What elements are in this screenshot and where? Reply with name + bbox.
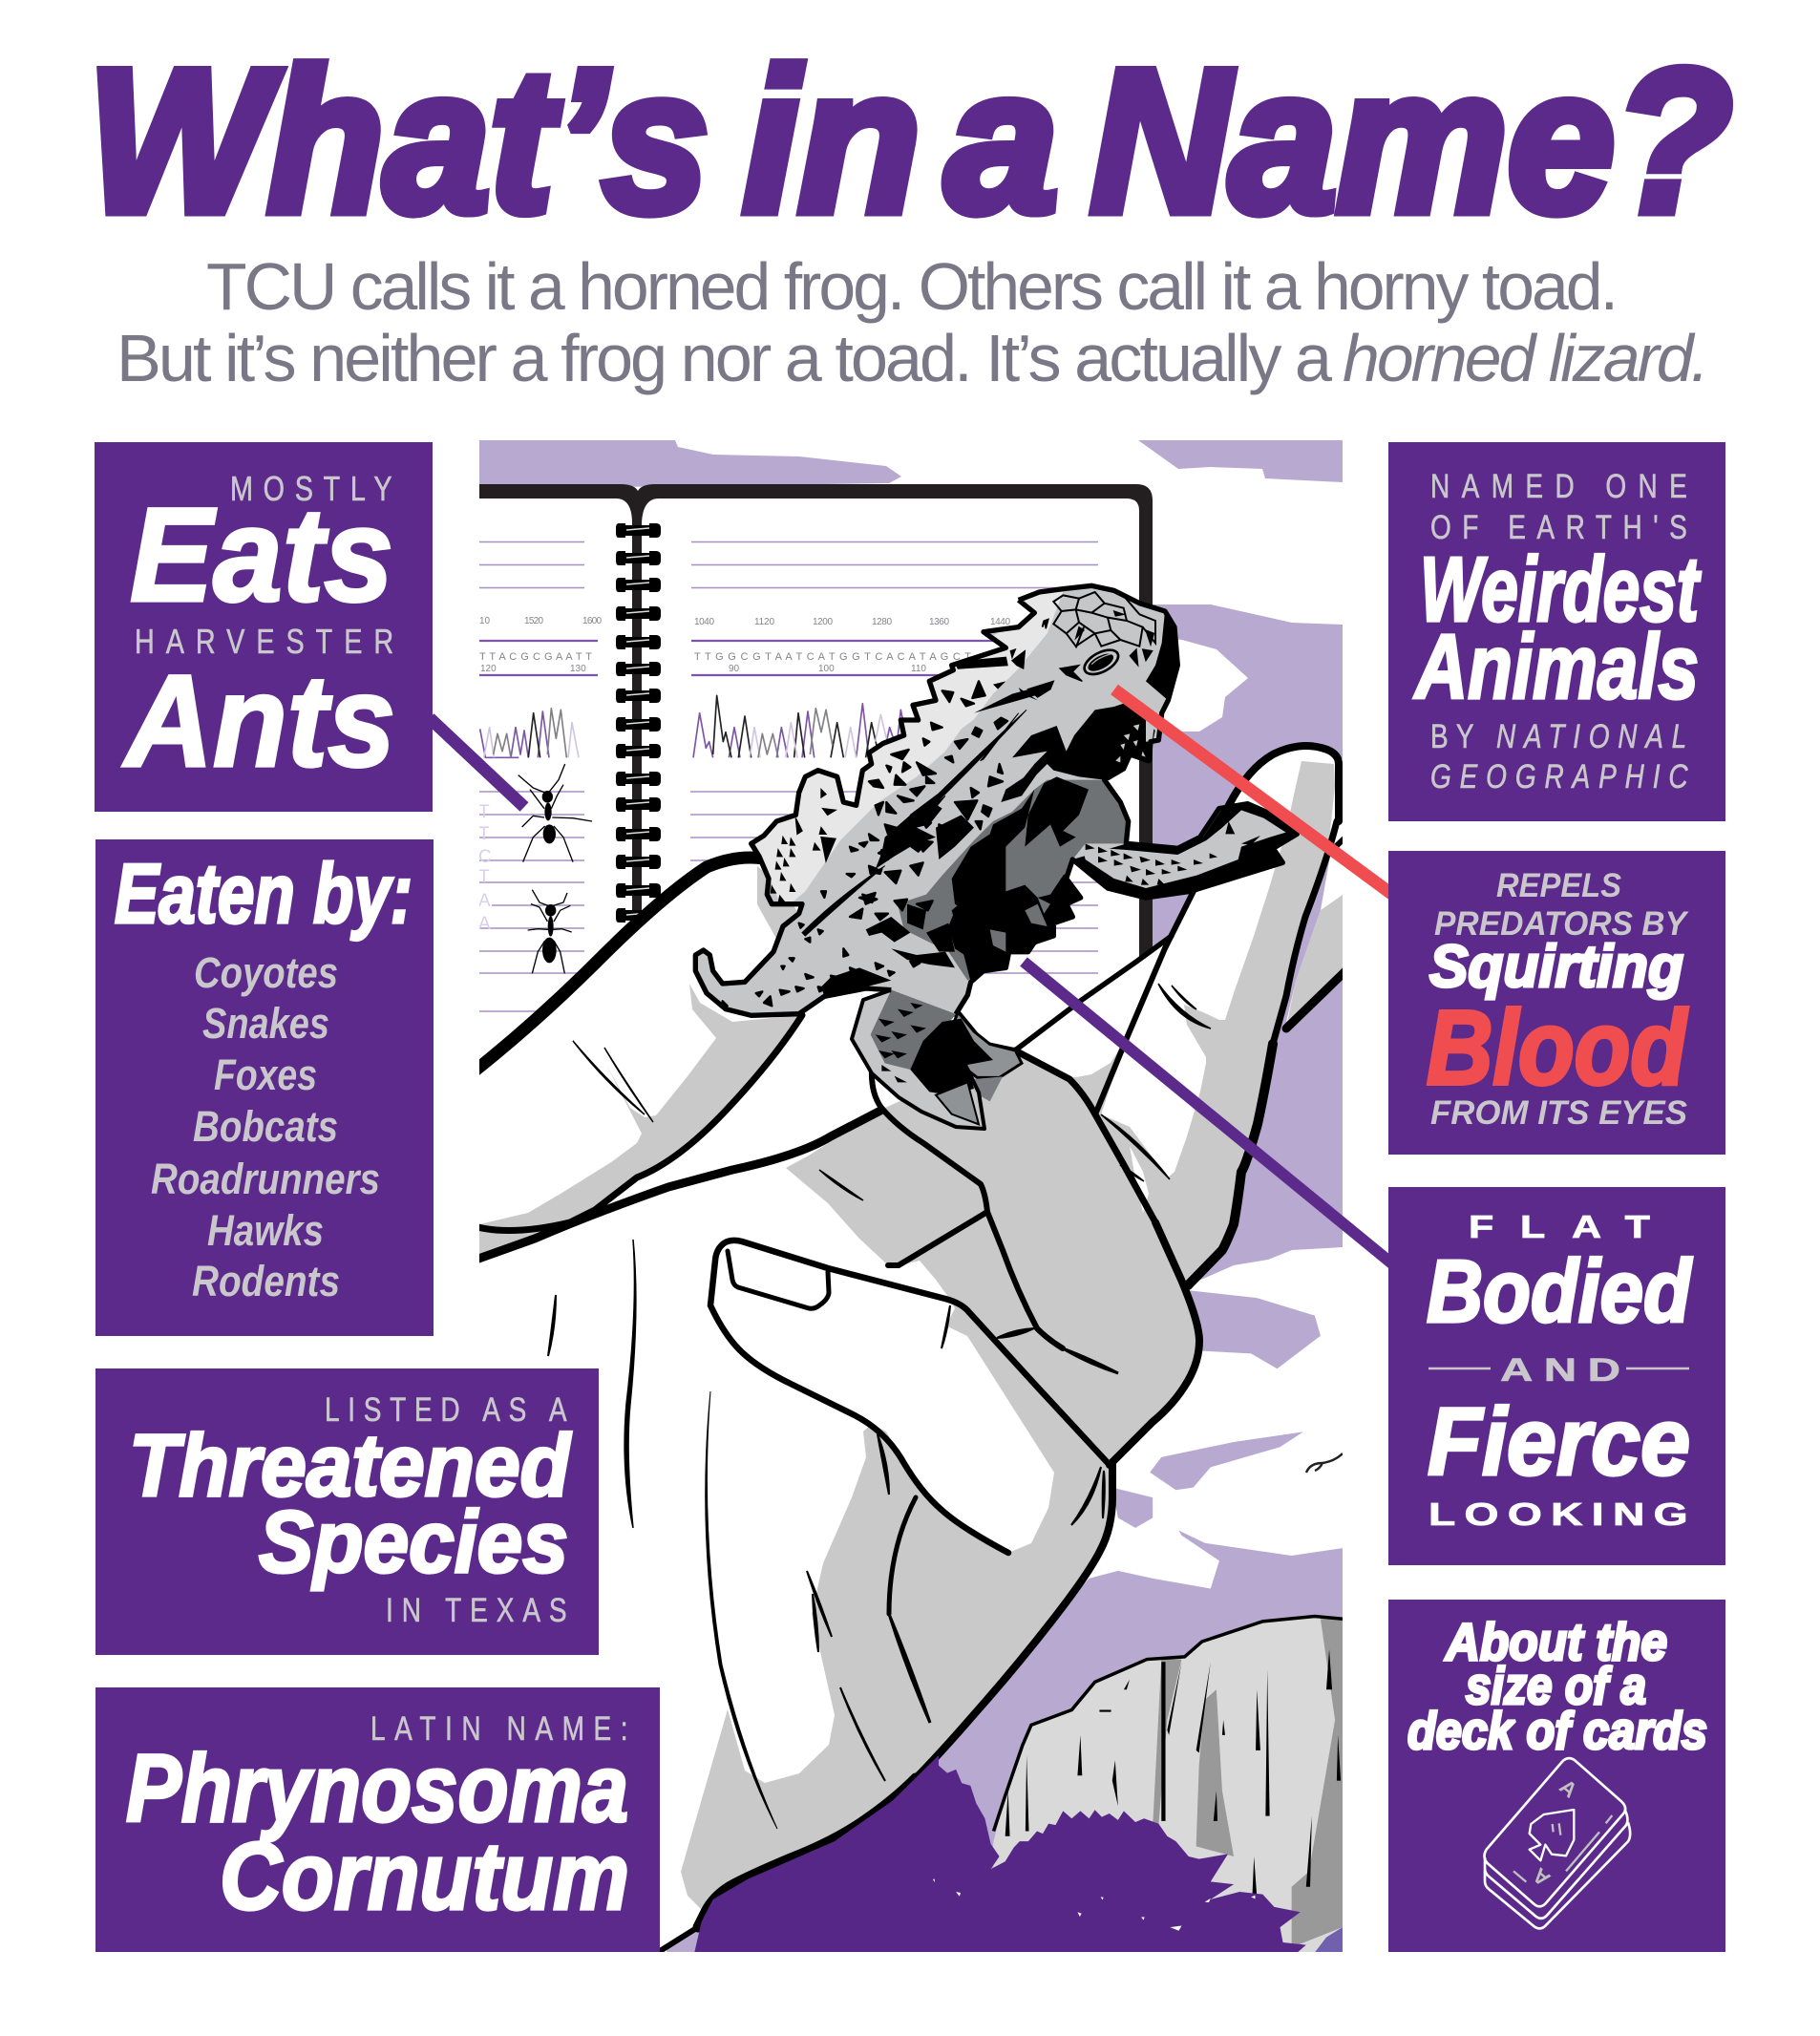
panel: squirting blood: REPELS [1496, 867, 1621, 904]
sequencing labels: 1040 [694, 617, 714, 627]
cliff [991, 1617, 1343, 1953]
predator list: Snakes [202, 999, 329, 1048]
sequencing labels: 130 [570, 664, 586, 674]
panel: weirdest animals: Weirdest [1420, 539, 1702, 641]
panel: weirdest animals [1388, 442, 1725, 821]
sequencing labels: 110 [911, 664, 926, 674]
panel: squirting blood: FROM ITS EYES [1430, 1094, 1687, 1132]
notebook ruled lines [479, 542, 1098, 1011]
title: a [945, 28, 1058, 255]
divider: and: AND [1500, 1352, 1620, 1388]
sequencing labels: 90 [729, 664, 740, 674]
panel: threatened species [95, 1368, 599, 1655]
chromatogram left [480, 709, 579, 757]
sequencing labels: 1200 [813, 617, 833, 627]
panel: weirdest animals: Animals [1413, 616, 1699, 718]
panel: eaten by predators: Eaten by: [115, 846, 413, 941]
panel: flat bodied and fierce looking: Bodied [1427, 1241, 1693, 1341]
sequencing labels: 1440 [990, 617, 1010, 627]
title: in [743, 28, 921, 255]
panel: eaten by predators [95, 839, 434, 1336]
panel: flat bodied and fierce looking: FLAT [1469, 1210, 1650, 1245]
icon: playing cards: A [1555, 1774, 1582, 1802]
panel: flat bodied and fierce looking [1388, 1187, 1725, 1565]
lizard forearm scales [771, 790, 836, 901]
hand: grey shading [479, 761, 1335, 1910]
callout line: blood from eye [1114, 689, 1394, 896]
lizard back and flank scales [711, 681, 1007, 1007]
central illustration [468, 440, 1348, 1958]
lizard head scale net [1043, 592, 1155, 647]
faded base letters: C [478, 847, 492, 867]
blood word: Blood [1427, 989, 1688, 1107]
callout line: flat body [1024, 962, 1394, 1265]
panel: weirdest animals: BY [1430, 717, 1474, 755]
subtitle: TCU calls it a horned frog. Others call it a horny toad. [206, 249, 1616, 324]
sequencing labels: 1360 [929, 617, 949, 627]
chromatogram right [693, 695, 904, 757]
notebook [478, 484, 1153, 1065]
callout line: ants [430, 718, 524, 807]
panel: deck of cards: deck of cards [1407, 1701, 1707, 1760]
panel: squirting blood: Squirting [1429, 934, 1683, 1000]
panel: latin name: Cornutum [220, 1823, 629, 1930]
panel: mostly eats harvester ants: HARVESTER [135, 622, 393, 661]
hand: black outlines [468, 746, 1348, 1958]
panel: latin name: LATIN NAME: [370, 1709, 628, 1748]
white cloud beside head [1163, 640, 1248, 732]
lizard body [698, 588, 1293, 1014]
predator list [151, 948, 380, 1305]
panel: weirdest animals: GEOGRAPHIC [1430, 757, 1689, 795]
predator list: Roadrunners [151, 1155, 380, 1203]
panel: mostly eats harvester ants [95, 442, 433, 812]
hand: white base [632, 750, 1343, 1943]
spiral rings and spine [616, 501, 661, 941]
panel: deck of cards [1388, 1600, 1725, 1952]
predator list: Rodents [192, 1257, 340, 1305]
panel: squirting blood: PREDATORS BY [1434, 905, 1689, 943]
hand: white highlights [873, 761, 1302, 1552]
lizard dorsal ridge [802, 710, 1026, 936]
lizard eye [1083, 648, 1119, 676]
panel: latin name [95, 1687, 660, 1952]
predator list: Bobcats [193, 1102, 338, 1151]
notebook cover [478, 484, 1153, 958]
panel: mostly eats harvester ants: MOSTLY [230, 469, 392, 508]
icon: bird [1306, 1453, 1343, 1473]
panel: flat bodied and fierce looking: LOOKING [1428, 1496, 1688, 1532]
faded base letters [479, 804, 491, 928]
sky: lavender shapes and clouds [478, 440, 1343, 1953]
title [88, 28, 1732, 255]
sequencing labels: 1600 [582, 616, 602, 626]
panel: mostly eats harvester ants: Eats [130, 479, 393, 629]
lizard flank black blotches [821, 764, 1044, 996]
lizard rear leg and foot [852, 990, 1022, 1129]
sequencing labels: 100 [818, 664, 835, 674]
hand: taper creases [548, 984, 1211, 1829]
cliff and bush [694, 1617, 1343, 1953]
panel: deck of cards: size of a [1466, 1656, 1646, 1715]
panel: squirting blood [1388, 851, 1725, 1155]
sequencing labels: 10 [479, 616, 491, 626]
panel: mostly eats harvester ants: Ants [122, 648, 395, 795]
panel: threatened species: Species [259, 1494, 568, 1591]
faded base letters: A [478, 891, 491, 911]
subtitle: But it’s neither a frog nor a toad. It’s actually a [116, 321, 1332, 395]
horned lizard [688, 573, 1324, 1129]
panel: threatened species: LISTED AS A [325, 1390, 567, 1429]
sequencing labels [479, 616, 1010, 674]
bush [694, 1755, 1306, 1953]
title: What’s [88, 28, 709, 255]
panel: weirdest animals: NAMED ONE [1430, 467, 1687, 505]
panel: weirdest animals: OF EARTH'S [1430, 508, 1687, 546]
predator list: Hawks [207, 1206, 324, 1255]
faded base letters: T [478, 802, 490, 822]
faded base letters: A [478, 914, 491, 934]
panel: deck of cards: About the [1444, 1612, 1667, 1671]
icon: playing cards: A [1528, 1863, 1555, 1891]
faded base letters: T [478, 867, 490, 887]
panel: flat bodied and fierce looking: Fierce [1428, 1389, 1690, 1495]
lizard teeth [1115, 707, 1160, 762]
sequencing labels: 1280 [872, 617, 892, 627]
title: Name? [1090, 28, 1732, 255]
sequencing labels: T T A C G C G A A T T [479, 651, 592, 663]
predator list: Coyotes [194, 948, 338, 997]
icon: ants [518, 764, 592, 973]
hand: back finger behind [1286, 821, 1343, 1022]
panel: weirdest animals: NATIONAL [1496, 717, 1686, 755]
sequencing labels: 120 [480, 664, 497, 674]
subtitle: horned lizard. [1343, 321, 1706, 395]
subtitle [116, 249, 1706, 395]
sequencing labels: T T G G C G T A A T C A T G G T C A C A T A G C T [694, 651, 971, 663]
panel: threatened species: IN TEXAS [386, 1591, 567, 1629]
panel: latin name: Phrynosoma [126, 1735, 628, 1842]
sequencing labels: 1120 [754, 617, 774, 627]
panel: threatened species: Threatened [129, 1417, 572, 1515]
faded base letters: T [478, 824, 490, 844]
sequencing labels: 1520 [524, 616, 543, 626]
icon: playing cards [1485, 1758, 1630, 1928]
predator list: Foxes [214, 1050, 317, 1099]
lizard outline [695, 585, 1297, 1015]
